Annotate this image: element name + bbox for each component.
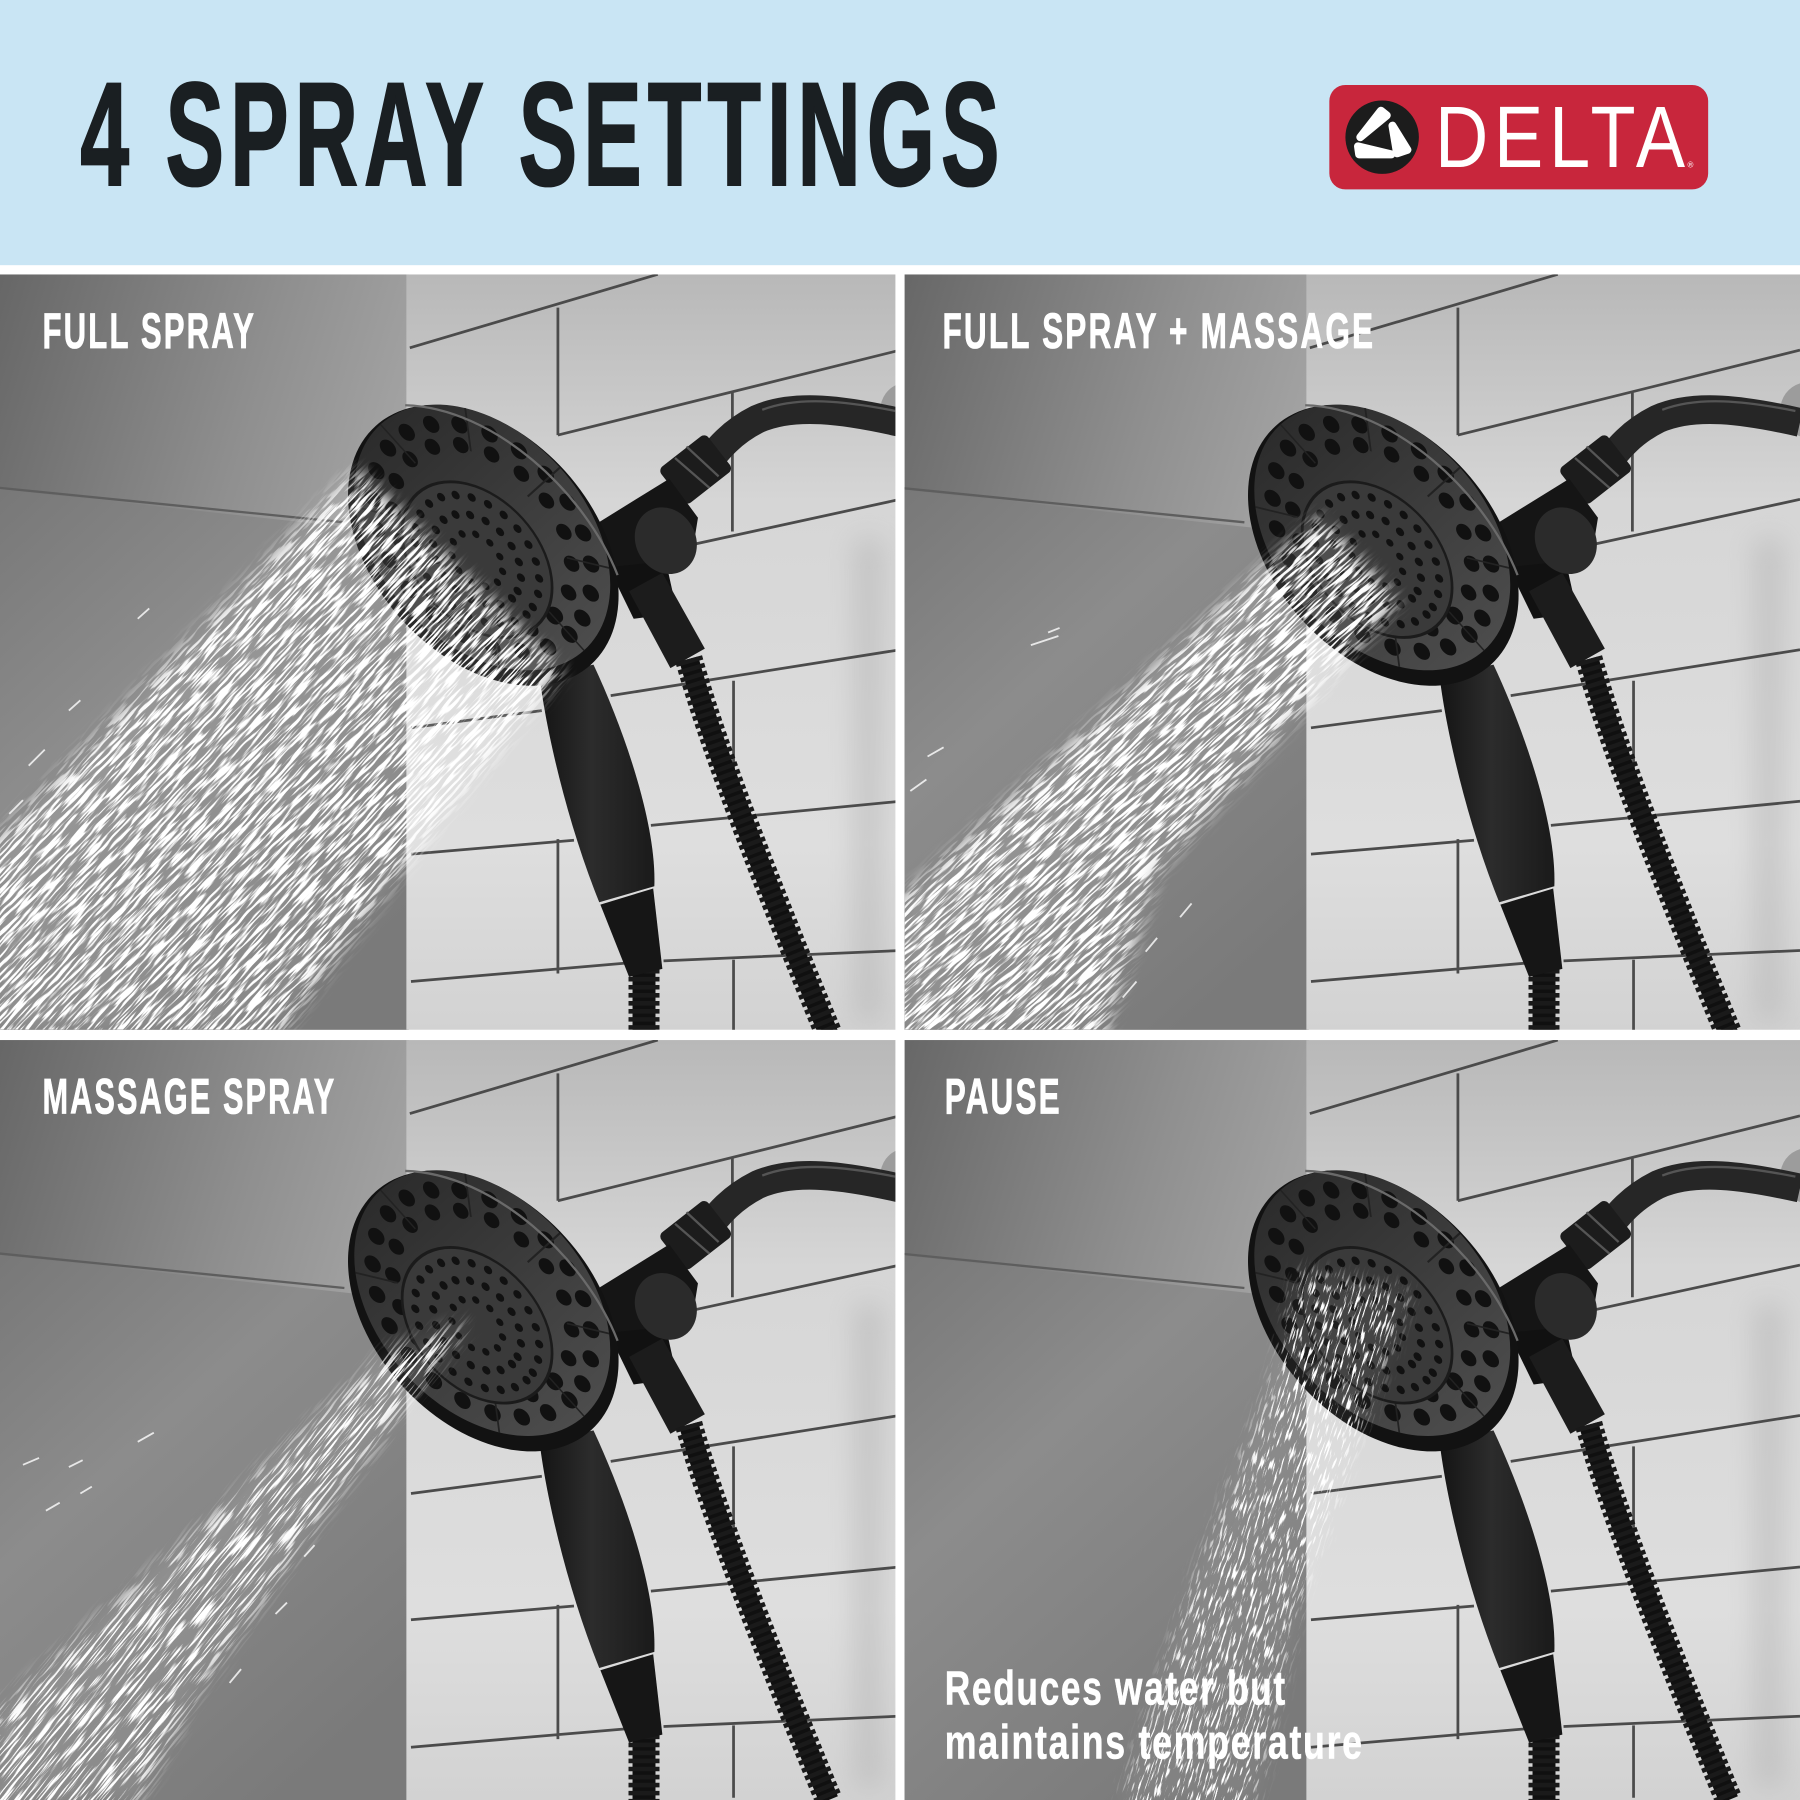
caption: pause note xyxy=(945,1662,1364,1770)
panel: pause xyxy=(904,1040,1800,1800)
panel: full spray xyxy=(0,274,896,1030)
spray: massage xyxy=(0,1321,471,1800)
caption: pause note: maintains temperature xyxy=(945,1716,1364,1770)
logo: Delta xyxy=(1329,85,1708,189)
title: 4 SPRAY SETTINGS xyxy=(80,53,1006,217)
spray: full xyxy=(0,470,562,1030)
spray: pause xyxy=(1123,1270,1410,1800)
label: full spray + massage: FULL SPRAY + MASSAGE xyxy=(942,302,1375,359)
panel: full spray + massage xyxy=(904,274,1800,1030)
logo: Delta: ® xyxy=(1688,161,1694,170)
caption: pause note: Reduces water but xyxy=(945,1662,1287,1716)
logo: Delta: DELTA xyxy=(1435,89,1691,186)
label: pause: PAUSE xyxy=(945,1068,1062,1125)
label: full spray: FULL SPRAY xyxy=(42,302,256,359)
panel: massage spray xyxy=(0,1040,896,1800)
spray: full + massage xyxy=(905,517,1398,1030)
header band xyxy=(0,0,1800,265)
label: massage spray: MASSAGE SPRAY xyxy=(42,1068,336,1125)
